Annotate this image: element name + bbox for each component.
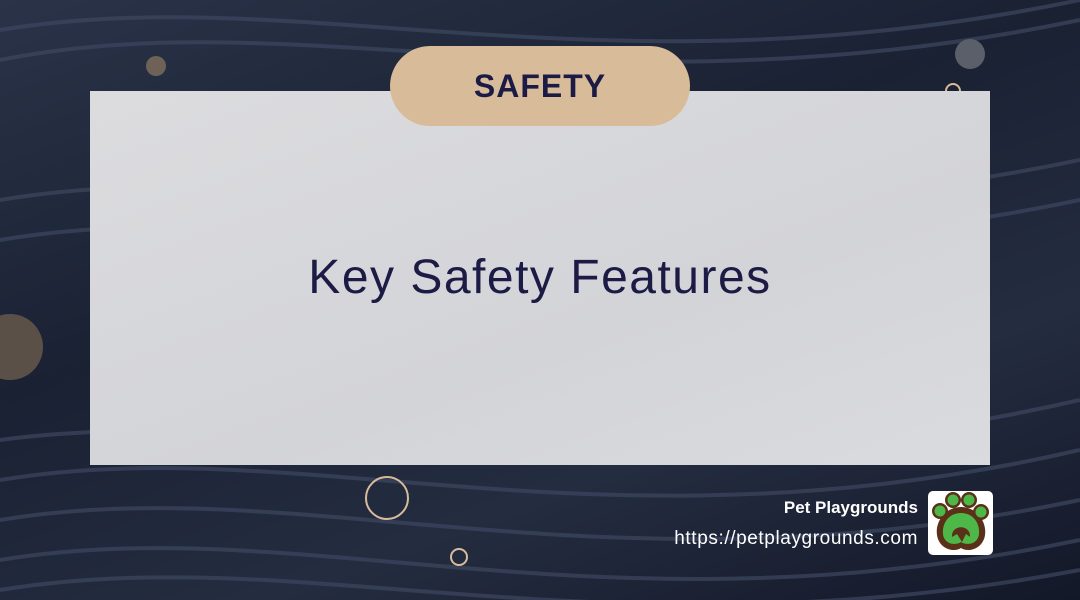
icon: paw logo — [928, 491, 993, 555]
title: Key Safety Features — [308, 251, 772, 304]
brand url: https://petplaygrounds.com — [674, 528, 918, 549]
brand name: Pet Playgrounds — [784, 498, 918, 517]
decorative circles — [0, 39, 985, 565]
heading badge: SAFETY: SAFETY — [474, 68, 606, 104]
heading badge: SAFETY — [390, 46, 690, 126]
panel: main card — [90, 91, 990, 465]
